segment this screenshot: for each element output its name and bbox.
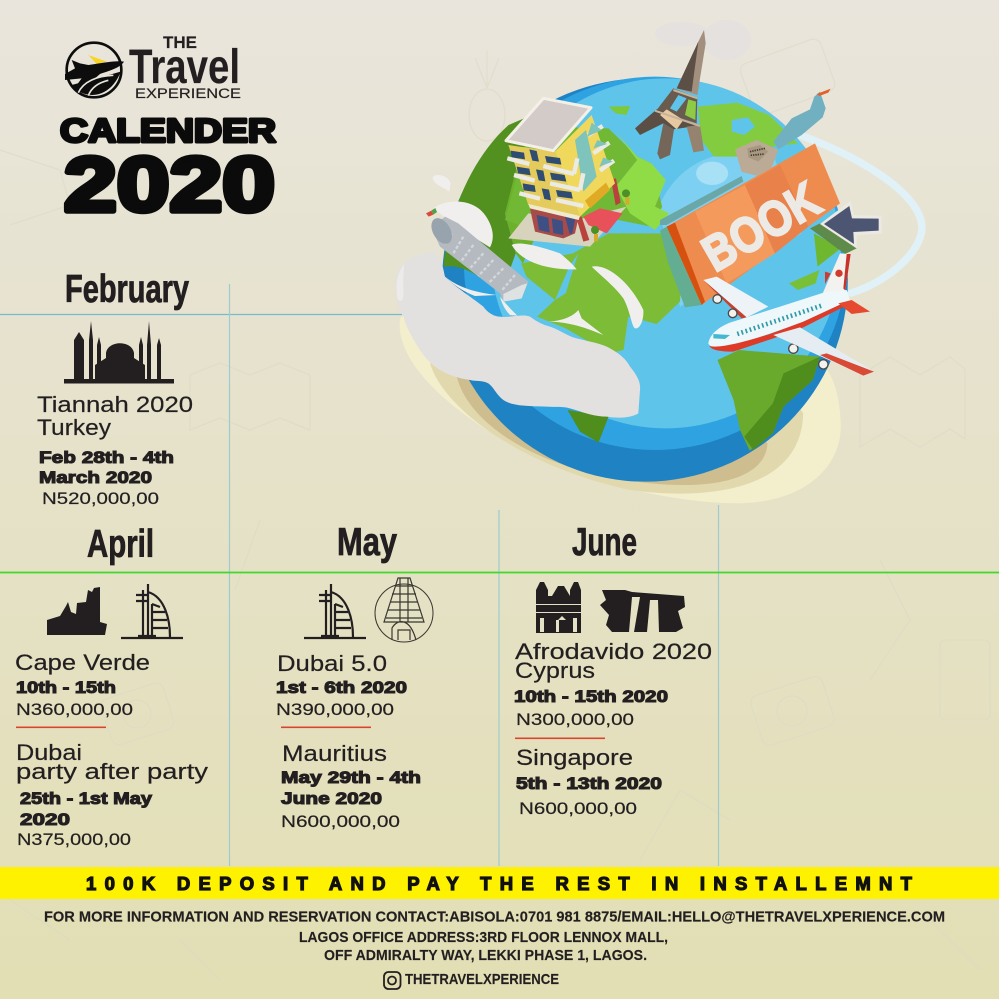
event: Tiannah 2020 Turkey: March 2020 (39, 468, 152, 487)
month: April (15, 523, 208, 849)
airplane (703, 253, 874, 376)
statue of liberty (735, 89, 831, 176)
event: Tiannah 2020 Turkey: N520,000,00 (42, 489, 159, 508)
event: Tiannah 2020 Turkey (37, 392, 193, 508)
event: Mauritius: June 2020 (281, 789, 382, 808)
logo: The Travel Experience (65, 33, 241, 101)
event: Afrodavido 2020 Cyprus: Cyprus (515, 658, 595, 683)
icon: instagram (384, 972, 400, 989)
month: June (514, 521, 712, 818)
event: Dubai party after party: Dubai (16, 740, 82, 765)
event: Tiannah 2020 Turkey: Turkey (37, 415, 111, 440)
illustration: globe with landmarks (395, 20, 922, 503)
event: Singapore (516, 745, 662, 818)
book sign: BOOK (693, 171, 830, 282)
sign shadow (660, 176, 743, 225)
logo wordmark: EXPERIENCE (135, 85, 241, 101)
event: Cape Verde (15, 650, 150, 719)
contact information: LAGOS OFFICE ADDRESS:3RD FLOOR LENNOX MALL, (299, 929, 668, 946)
banner: deposit: 100K DEPOSIT AND PAY THE REST IN INSTALLEMNT (86, 873, 915, 894)
icon: temple (375, 578, 433, 642)
arrow cursor (810, 201, 882, 254)
logo wordmark: THE (163, 33, 197, 52)
event: Dubai 5.0: Dubai 5.0 (277, 651, 387, 676)
event: Tiannah 2020 Turkey: Feb 28th - 4th (39, 448, 174, 467)
small clouds (433, 175, 643, 335)
hotel (506, 98, 630, 247)
event: Afrodavido 2020 Cyprus: 10th - 15th 2020 (514, 687, 668, 706)
event: Cape Verde: N360,000,00 (16, 700, 133, 719)
event: Singapore: N600,000,00 (519, 799, 637, 818)
logo wordmark (129, 33, 241, 101)
event: Afrodavido 2020 Cyprus (514, 639, 712, 729)
event: Singapore: Singapore (516, 745, 633, 770)
title: 2020 (64, 142, 275, 228)
event: Afrodavido 2020 Cyprus: N300,000,00 (516, 710, 634, 729)
heading: February: February (65, 268, 189, 311)
event: Afrodavido 2020 Cyprus: Afrodavido 2020 (515, 639, 712, 664)
month: May (276, 521, 433, 831)
book sign (667, 143, 840, 305)
title: CALENDER (60, 112, 276, 149)
event: Dubai party after party: 2020 (20, 810, 70, 829)
contact information: FOR MORE INFORMATION AND RESERVATION CONTACT:ABISOLA:0701 981 8875/EMAIL:HELLO@THETRAVELXPERIENCE.COM (44, 908, 945, 926)
event: Dubai 5.0: 1st - 6th 2020 (276, 678, 407, 697)
heading: May: May (337, 521, 397, 564)
event: Dubai party after party (16, 740, 208, 849)
icon: Cyprus church (536, 582, 581, 633)
event: Dubai party after party: 25th - 1st May (20, 789, 153, 808)
ring path (800, 135, 922, 293)
logo badge (65, 43, 124, 97)
month: February (37, 268, 193, 508)
Eiffel tower (635, 30, 706, 159)
contact information: OFF ADMIRALTY WAY, LEKKI PHASE 1, LAGOS. (324, 947, 647, 964)
grid lines (0, 284, 999, 866)
icon: mosque (64, 321, 174, 384)
event: Mauritius: Mauritius (282, 741, 387, 766)
globe and base plate (400, 77, 848, 503)
event: Tiannah 2020 Turkey: Tiannah 2020 (37, 392, 193, 417)
tower (426, 208, 528, 302)
event: Mauritius: May 29th - 4th (281, 768, 421, 787)
logo wordmark: Travel (129, 41, 240, 94)
banner: deposit (0, 867, 999, 899)
heading: April: April (87, 523, 154, 566)
icon: Burj Al Arab (121, 584, 183, 638)
title (60, 112, 276, 228)
icon: Burj Al Arab (304, 584, 366, 638)
heading: June: June (572, 521, 637, 564)
event: Cape Verde: 10th - 15th (16, 678, 116, 697)
event: Dubai party after party: N375,000,00 (17, 830, 131, 849)
contact information (44, 908, 945, 964)
top cloud (655, 20, 751, 60)
statue, book sign, arrow and airplane (660, 89, 882, 376)
event: Cape Verde: Cape Verde (15, 650, 150, 675)
Pisa tower and clouds (395, 175, 643, 418)
instagram handle: THETRAVELXPERIENCE (405, 971, 559, 988)
event: Dubai party after party: party after party (16, 759, 208, 784)
large cloud (395, 252, 640, 418)
icon: Marina Bay Sands (600, 590, 685, 632)
event: Dubai 5.0 (276, 651, 407, 719)
event: Dubai 5.0: N390,000,00 (276, 700, 394, 719)
event: Singapore: 5th - 13th 2020 (516, 774, 662, 793)
icon: Cape Verde skyline (47, 587, 107, 635)
event: Mauritius (281, 741, 421, 831)
event: Mauritius: N600,000,00 (281, 812, 400, 831)
